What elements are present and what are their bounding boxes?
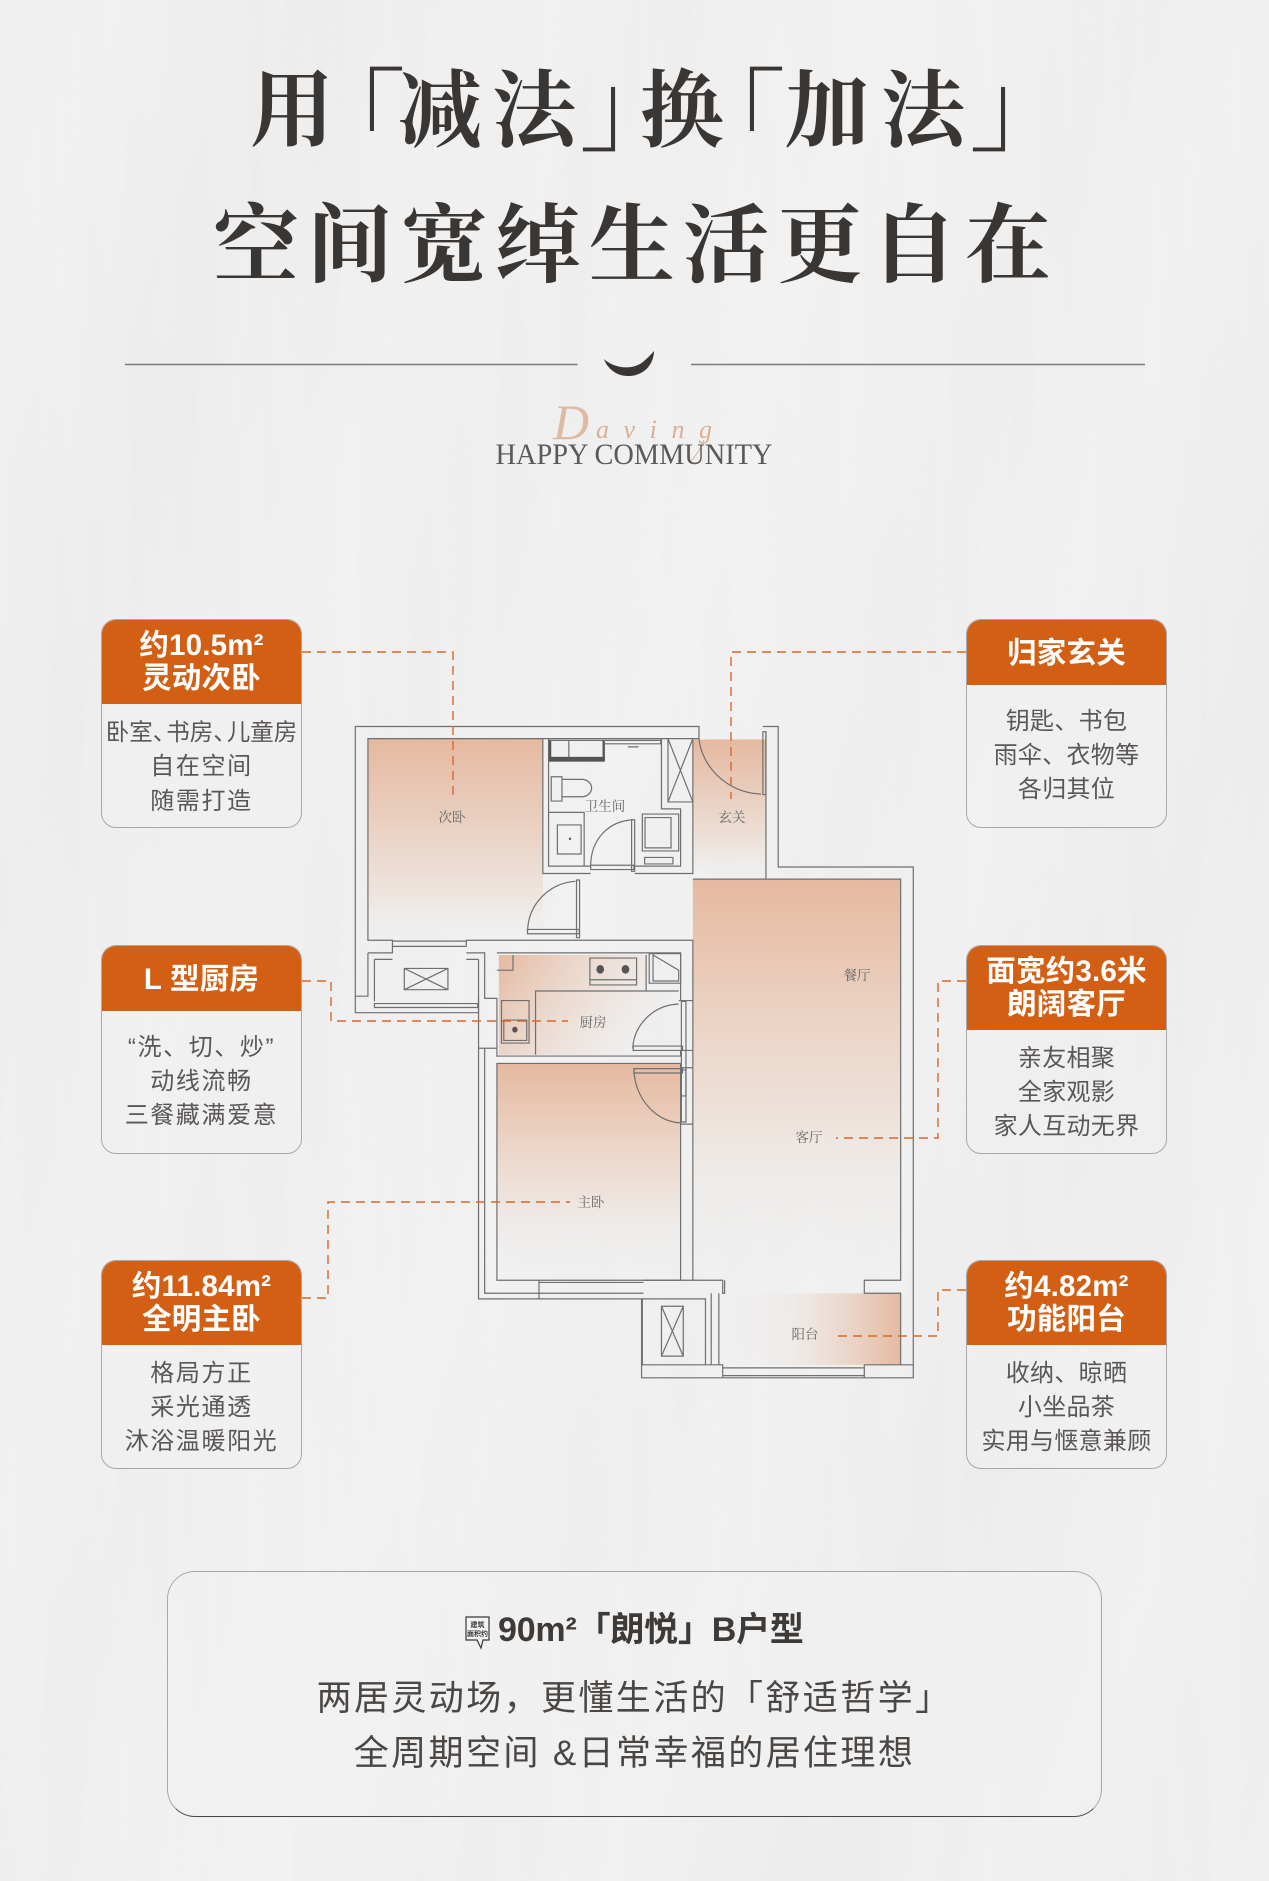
logo: Daxing Happy Community: aving (596, 415, 712, 444)
card: living room (966, 945, 1167, 1154)
card header (966, 945, 1167, 1030)
card body (994, 708, 1139, 803)
card body: 家人互动无界 (994, 1113, 1139, 1140)
card header (966, 619, 1167, 685)
card header: 功能阳台 (1007, 1302, 1126, 1336)
panel heading: 90m²「朗悦」B户型 (498, 1611, 804, 1649)
title: 空间宽绰生活更自在 (213, 198, 1051, 294)
card body: 采光通透 (150, 1394, 253, 1421)
card header: 约11.84m² (132, 1270, 271, 1302)
card header: 约4.82m² (1004, 1270, 1129, 1302)
card header: 面宽约3.6米 (986, 954, 1147, 988)
card body: 实用与惬意兼顾 (981, 1428, 1152, 1455)
card body: 各归其位 (1018, 776, 1115, 803)
title: 」」 (580, 53, 1070, 164)
card body: 雨伞、衣物等 (994, 742, 1139, 769)
title: 用减法换加法 (250, 66, 971, 159)
card body (125, 1034, 278, 1129)
card body (125, 1360, 278, 1455)
card header: 全明主卧 (142, 1302, 261, 1336)
card header (101, 945, 302, 1011)
room labels: 玄关 (718, 810, 746, 825)
card body (106, 719, 297, 815)
card body: 亲友相聚 (1018, 1045, 1115, 1072)
panel text line 1: 两居灵动场，更懂生活的「舒适哲学」 (317, 1679, 952, 1718)
card: entrance (966, 619, 1167, 828)
room labels: 餐厅 (844, 967, 870, 983)
card body (994, 1045, 1139, 1140)
room labels: 厨房 (580, 1014, 606, 1030)
card body: 沐浴温暖阳光 (125, 1428, 278, 1455)
card body: “洗、切、炒” (128, 1034, 275, 1061)
title (213, 53, 1070, 294)
card header: L 型厨房 (144, 963, 259, 996)
room labels: 次卧 (438, 809, 466, 825)
card header: 归家玄关 (1007, 637, 1126, 670)
card: master bedroom (101, 1260, 302, 1469)
card body: 随需打造 (150, 788, 253, 815)
card header (101, 619, 302, 704)
room labels: 主卧 (578, 1194, 605, 1210)
room labels: 阳台 (792, 1327, 819, 1342)
icon: area speech bubble: 面积约 (467, 1629, 488, 1638)
logo: Daxing Happy Community: D (552, 394, 589, 450)
room labels: 客厅 (796, 1130, 822, 1145)
divider with crescent (125, 351, 1145, 376)
summary panel (167, 1571, 1102, 1817)
card: kitchen (101, 945, 302, 1154)
room labels (438, 798, 870, 1342)
card header: 朗阔客厅 (1007, 988, 1126, 1020)
card header: 约10.5m² (139, 628, 264, 662)
logo: Daxing Happy Community: HAPPY COMMUNITY (496, 439, 772, 471)
card body: 卧室、书房、儿童房 (106, 719, 297, 745)
card header: 灵动次卧 (142, 662, 261, 694)
title: 「「 (305, 63, 785, 174)
card body: 小坐品茶 (1018, 1394, 1115, 1421)
icon: area speech bubble (465, 1616, 490, 1650)
icon: area speech bubble: 建筑 (470, 1620, 484, 1629)
card: secondary bedroom (101, 619, 302, 828)
card body: 动线流畅 (150, 1068, 253, 1095)
card body: 三餐藏满爱意 (125, 1102, 278, 1129)
card body (981, 1360, 1152, 1455)
room shading (368, 739, 901, 1365)
card header (101, 1260, 302, 1345)
card body: 全家观影 (1018, 1079, 1115, 1106)
room labels: 卫生间 (585, 798, 625, 814)
logo: Daxing Happy Community (496, 394, 772, 471)
card: balcony (966, 1260, 1167, 1469)
card body: 格局方正 (150, 1360, 253, 1387)
card body: 自在空间 (150, 753, 253, 780)
panel text line 2: 全周期空间 &日常幸福的居住理想 (354, 1734, 915, 1773)
wall lines (355, 726, 913, 1378)
card body: 钥匙、书包 (1006, 708, 1127, 735)
card header (966, 1260, 1167, 1345)
card body: 收纳、晾晒 (1006, 1360, 1127, 1387)
leader lines (302, 652, 966, 1336)
